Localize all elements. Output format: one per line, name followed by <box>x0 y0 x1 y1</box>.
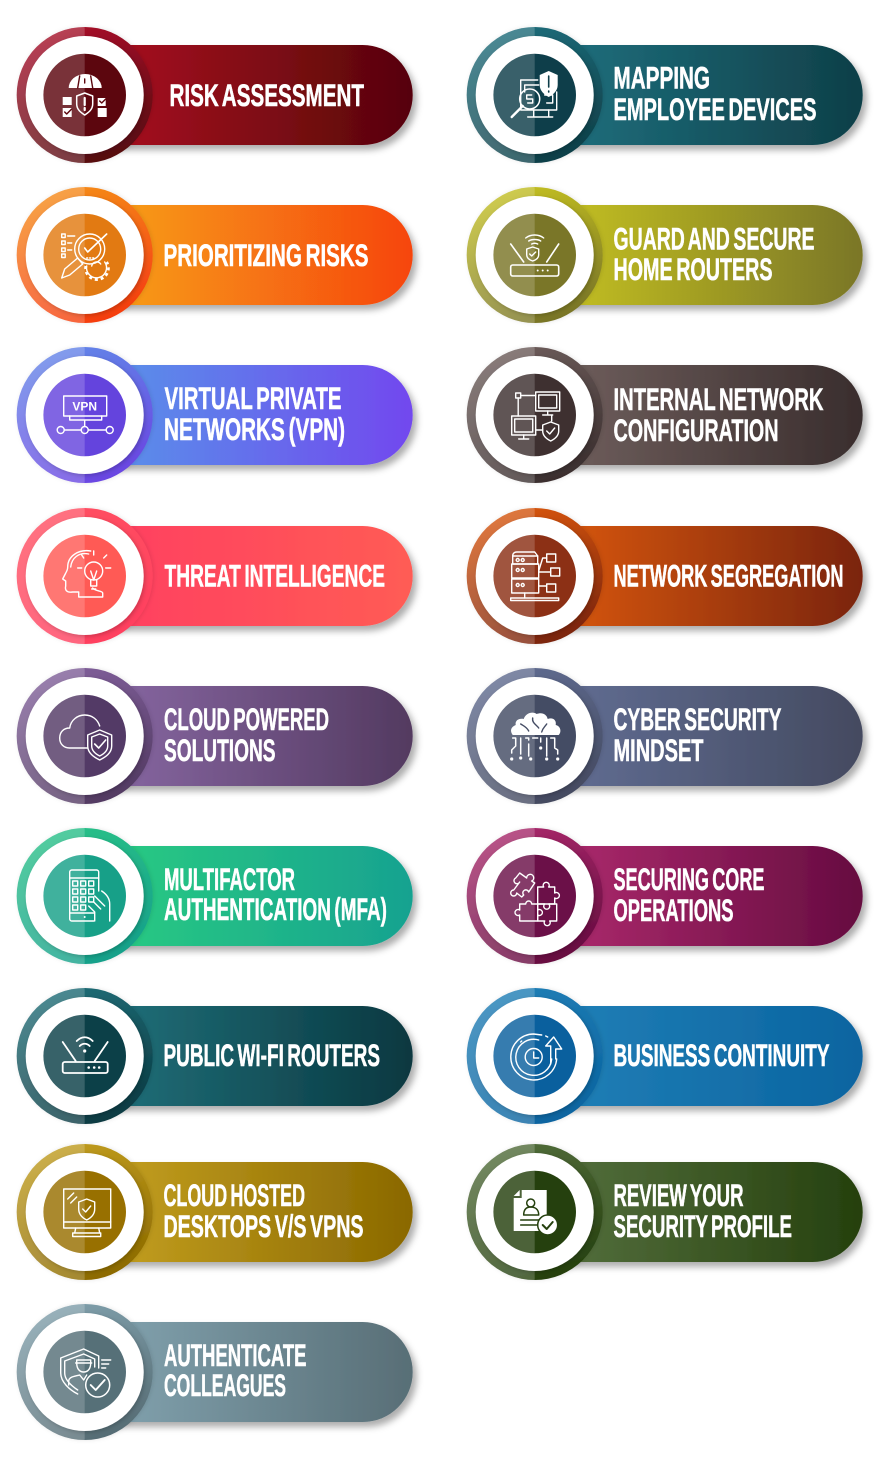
pill bar <box>520 365 863 465</box>
label: HOME ROUTERS <box>614 251 772 287</box>
label: REVIEW YOUR <box>614 1177 744 1213</box>
icon: wi-fi router <box>63 1037 108 1073</box>
label: THREAT INTELLIGENCE <box>164 558 385 594</box>
badge <box>467 27 603 163</box>
label: CLOUD HOSTED <box>164 1177 305 1213</box>
icon: brain circuit <box>510 713 560 761</box>
icon: cloud and shield <box>60 715 112 760</box>
panel: cyber security mindset <box>467 668 863 804</box>
label: AUTHENTICATE <box>164 1337 306 1373</box>
pill bar <box>70 1006 413 1106</box>
pill bar <box>520 526 863 626</box>
label: MINDSET <box>614 732 704 768</box>
label: DESKTOPS V/S VPNS <box>164 1208 364 1244</box>
pill bar <box>70 1322 413 1422</box>
panel: multifactor authentication <box>17 828 413 964</box>
pill bar <box>520 45 863 145</box>
panel: virtual private networks <box>17 347 413 483</box>
badge <box>17 508 153 644</box>
panel: business continuity <box>467 988 863 1124</box>
panel: prioritizing risks <box>17 187 413 323</box>
icon: gauge and shield checklist <box>63 74 108 117</box>
icon: VPN monitor network: VPN <box>72 400 97 414</box>
label: SOLUTIONS <box>164 732 276 768</box>
label <box>614 381 824 448</box>
icon: monitor magnifier shield <box>512 71 558 117</box>
label: MULTIFACTOR <box>164 861 295 897</box>
panel: network segregation <box>467 508 863 644</box>
icon: server rack with nodes <box>511 552 560 600</box>
badge <box>17 668 153 804</box>
panel: threat intelligence <box>17 508 413 644</box>
badge <box>467 988 603 1124</box>
badge <box>467 187 603 323</box>
label: SECURING CORE <box>614 861 764 897</box>
pill bar <box>520 1162 863 1262</box>
pill bar <box>70 365 413 465</box>
label: PRIORITIZING RISKS <box>164 237 368 273</box>
label <box>614 60 816 127</box>
label: COLLEAGUES <box>164 1367 286 1403</box>
label <box>614 701 782 768</box>
badge <box>17 27 153 163</box>
label <box>164 380 345 447</box>
badge <box>17 187 153 323</box>
icon: monitor with shield <box>64 1189 111 1236</box>
icon: head with light bulb <box>63 551 111 597</box>
panel: review your security profile <box>467 1144 863 1280</box>
badge <box>467 347 603 483</box>
label: VIRTUAL PRIVATE <box>164 380 342 416</box>
panel: cloud powered solutions <box>17 668 413 804</box>
pill bar <box>520 846 863 946</box>
label: CONFIGURATION <box>614 412 778 448</box>
panel: risk assessment <box>17 27 413 163</box>
label <box>164 1337 306 1403</box>
badge <box>467 668 603 804</box>
pill bar <box>520 686 863 786</box>
icon: shield with person and check <box>61 1349 111 1397</box>
badge <box>17 988 153 1124</box>
pill bar <box>70 45 413 145</box>
label: AUTHENTICATION (MFA) <box>164 891 387 927</box>
label <box>614 861 764 928</box>
icon: profile document with check <box>514 1190 558 1235</box>
badge <box>17 1304 153 1440</box>
badge <box>467 1144 603 1280</box>
icon: VPN monitor network <box>57 396 113 434</box>
label: CLOUD POWERED <box>164 701 329 737</box>
panel: authenticate colleagues <box>17 1304 413 1440</box>
pill bar <box>520 205 863 305</box>
pill bar <box>70 1162 413 1262</box>
badge <box>467 828 603 964</box>
label <box>164 1177 364 1244</box>
panel: guard and secure home routers <box>467 187 863 323</box>
badge <box>17 1144 153 1280</box>
badge <box>17 347 153 483</box>
label <box>614 1177 792 1244</box>
badge <box>467 508 603 644</box>
icon: tablet keypad and hand <box>70 870 110 921</box>
pill bar <box>70 686 413 786</box>
label: RISK ASSESSMENT <box>170 77 364 113</box>
icon: magnifier checklist pencil gear <box>62 234 108 280</box>
icon: router with shield <box>511 235 559 276</box>
icon: clock with circular arrow <box>511 1034 562 1080</box>
label: OPERATIONS <box>614 892 734 928</box>
icon: networked monitors with shield <box>512 392 560 441</box>
label: MAPPING <box>614 60 710 96</box>
panel: securing core operations <box>467 828 863 964</box>
badge <box>17 828 153 964</box>
label <box>614 221 814 287</box>
panel: public wi-fi routers <box>17 988 413 1124</box>
icon: puzzle pieces <box>511 873 559 926</box>
panel: mapping employee devices <box>467 27 863 163</box>
panel: cloud hosted desktops <box>17 1144 413 1280</box>
label: PUBLIC WI-FI ROUTERS <box>164 1037 380 1073</box>
pill bar <box>70 526 413 626</box>
label <box>164 861 387 927</box>
panel: internal network configuration <box>467 347 863 483</box>
label <box>164 701 329 768</box>
pill bar <box>520 1006 863 1106</box>
pill bar <box>70 846 413 946</box>
label: NETWORKS (VPN) <box>164 411 345 447</box>
pill bar <box>70 205 413 305</box>
